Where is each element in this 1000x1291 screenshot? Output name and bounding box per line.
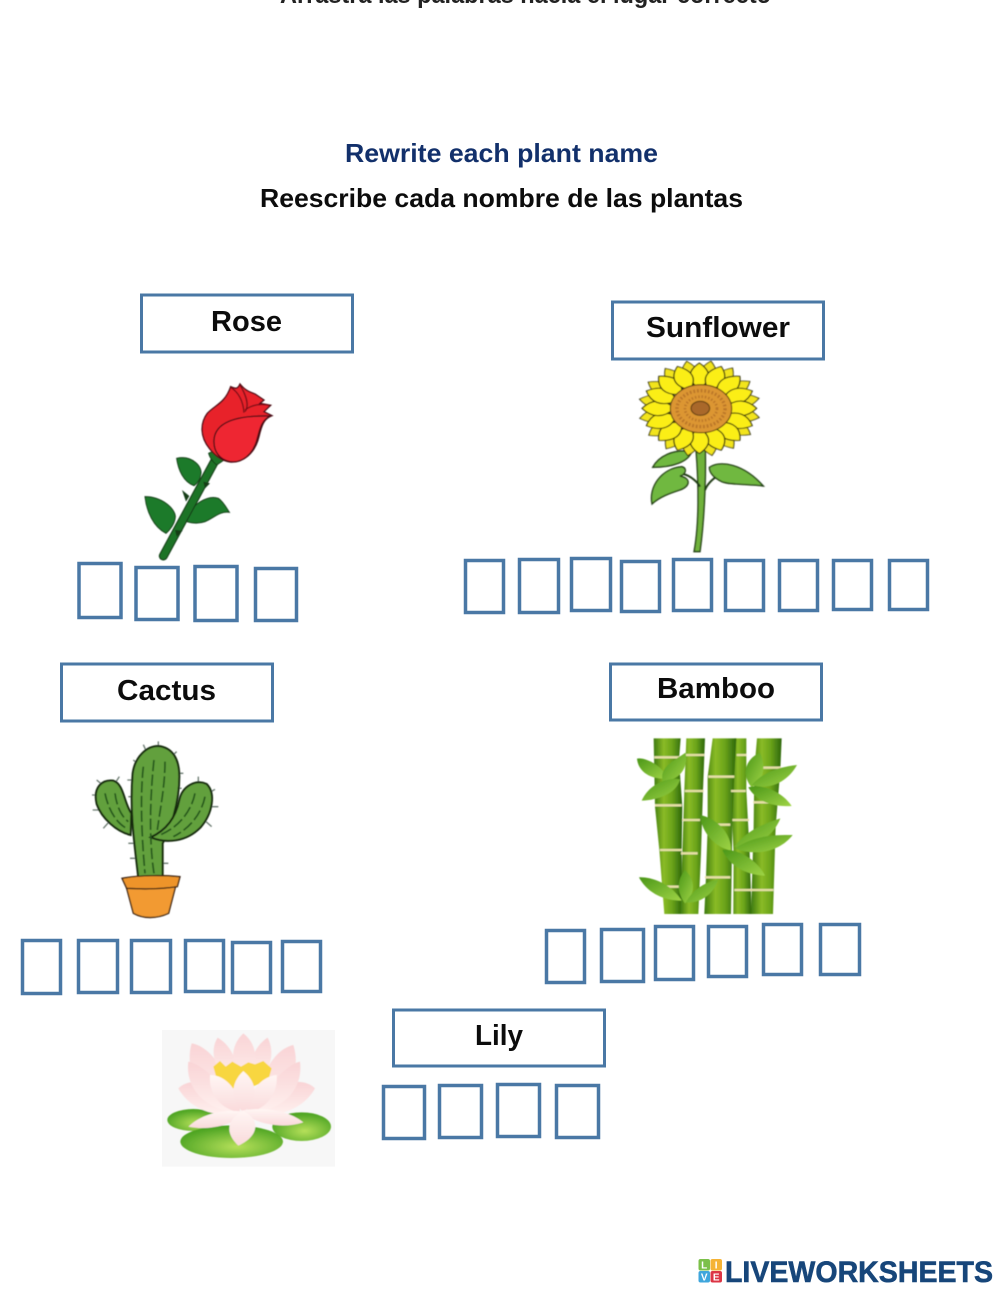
wordmark: LIVEWORKSHEETS [725, 1256, 993, 1289]
subtitle: Reescribe cada nombre de las plantas [260, 183, 743, 213]
rose name box [142, 295, 352, 352]
sunflower name box [612, 302, 824, 359]
icon: sunflower [638, 360, 763, 552]
cactus name box [62, 664, 272, 721]
panel: cactus [22, 664, 320, 994]
logo: liveworksheets [698, 1256, 993, 1289]
panel: rose [79, 295, 352, 620]
icon: water lily [162, 1030, 335, 1167]
icon: live tiles [698, 1259, 722, 1284]
icon: live tiles: V [701, 1272, 708, 1284]
sunflower letter boxes [466, 558, 928, 612]
panel: sunflower [466, 302, 928, 612]
panel: bamboo [546, 664, 860, 982]
rose letter boxes [79, 564, 296, 620]
icon: live tiles: E [713, 1272, 720, 1284]
icon: cactus [92, 741, 218, 918]
sunflower name box: Sunflower [646, 312, 790, 344]
icon: live tiles: I [715, 1260, 718, 1272]
icon: bamboo [637, 738, 797, 914]
lily letter boxes [384, 1084, 598, 1138]
icon: rose [145, 384, 272, 556]
lily name box [394, 1010, 604, 1066]
lily name box: Lily [475, 1020, 523, 1052]
bamboo letter boxes [546, 924, 860, 982]
rose name box: Rose [211, 306, 282, 338]
bamboo name box: Bamboo [657, 673, 775, 705]
bamboo name box [610, 664, 822, 720]
title: Rewrite each plant name [345, 138, 658, 168]
icon: live tiles: L [701, 1260, 707, 1272]
cactus name box: Cactus [117, 675, 216, 707]
panel: lily [162, 1010, 604, 1167]
cactus letter boxes [22, 940, 320, 994]
